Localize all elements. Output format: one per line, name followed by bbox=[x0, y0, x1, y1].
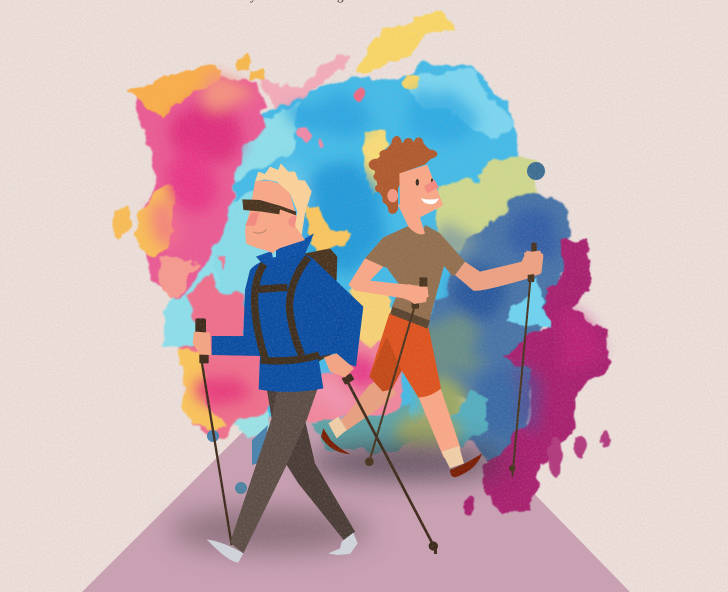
shirt bbox=[365, 225, 465, 321]
backpack bbox=[305, 248, 337, 362]
face bbox=[399, 165, 443, 217]
wash: lower pink and yellow bbox=[178, 278, 405, 432]
eyes bbox=[416, 178, 433, 186]
sunglasses bbox=[242, 199, 296, 215]
ear bbox=[387, 189, 398, 202]
sock bbox=[442, 446, 464, 468]
nose bbox=[424, 180, 439, 193]
left pole bbox=[365, 277, 427, 466]
neck bbox=[265, 235, 305, 253]
right pole bbox=[342, 373, 438, 554]
wash: orange accents left bbox=[112, 55, 266, 298]
nose bbox=[245, 213, 259, 226]
left pole bbox=[195, 318, 232, 545]
rear shoe bbox=[328, 533, 358, 555]
rear leg bbox=[267, 388, 355, 542]
hair bbox=[255, 163, 312, 235]
hiker: front man with blond hair bbox=[193, 163, 438, 563]
cheek bbox=[288, 216, 300, 227]
front shoe bbox=[207, 539, 243, 563]
wash: pink tones left bbox=[151, 81, 251, 247]
shorts shade bbox=[369, 337, 402, 391]
front leg bbox=[230, 387, 318, 553]
wash: yellow-green bbox=[432, 155, 540, 250]
mouth bbox=[253, 229, 267, 233]
back leg bbox=[337, 377, 397, 432]
cropped caption letters at top edge bbox=[250, 0, 344, 3]
wash: magenta tones bbox=[514, 315, 597, 430]
wash: yellow top bbox=[358, 14, 450, 72]
pink path bbox=[82, 315, 630, 592]
wash: blue bbox=[165, 62, 520, 440]
hiker: back man with red curly hair bbox=[321, 136, 543, 477]
front leg bbox=[418, 389, 461, 458]
left hand bbox=[405, 284, 428, 304]
face bbox=[245, 181, 302, 252]
shorts bbox=[369, 313, 441, 397]
left arm bbox=[348, 258, 429, 303]
wash: navy drops bbox=[207, 162, 545, 494]
wash: navy bbox=[420, 195, 572, 470]
back sock bbox=[328, 417, 347, 438]
back shoe bbox=[321, 428, 351, 454]
ground shadow: back hiker bbox=[305, 445, 505, 479]
right hand bbox=[324, 353, 354, 377]
wash: olive lower bbox=[393, 408, 457, 452]
jacket bbox=[212, 253, 363, 392]
wash: pink and orange left bbox=[135, 52, 350, 298]
watercolor splash bbox=[112, 14, 610, 515]
wash: magenta bbox=[461, 240, 610, 515]
jacket arm crease bbox=[310, 294, 343, 347]
wash: deep blue tones bbox=[272, 94, 474, 270]
smile bbox=[421, 198, 439, 204]
wash: yellow spots over blue bbox=[364, 73, 419, 195]
right pole bbox=[509, 243, 537, 477]
wash: navy tones bbox=[420, 206, 558, 434]
collar bbox=[256, 233, 314, 262]
belt bbox=[390, 307, 430, 329]
left hand bbox=[193, 332, 211, 355]
right hand bbox=[524, 251, 543, 275]
wash: pale pink tones lower bbox=[196, 361, 382, 408]
harness straps bbox=[255, 257, 319, 361]
wash: small pink spots bbox=[218, 89, 365, 268]
wash: orange behind shoulder bbox=[306, 208, 346, 252]
hair bbox=[369, 136, 437, 214]
ground shadow: front hiker bbox=[170, 508, 370, 552]
neck bbox=[397, 203, 425, 234]
shoe bbox=[450, 453, 482, 477]
wash: light blue bell bbox=[505, 278, 550, 326]
wash: teal lower bbox=[315, 388, 488, 452]
right arm bbox=[455, 251, 543, 291]
